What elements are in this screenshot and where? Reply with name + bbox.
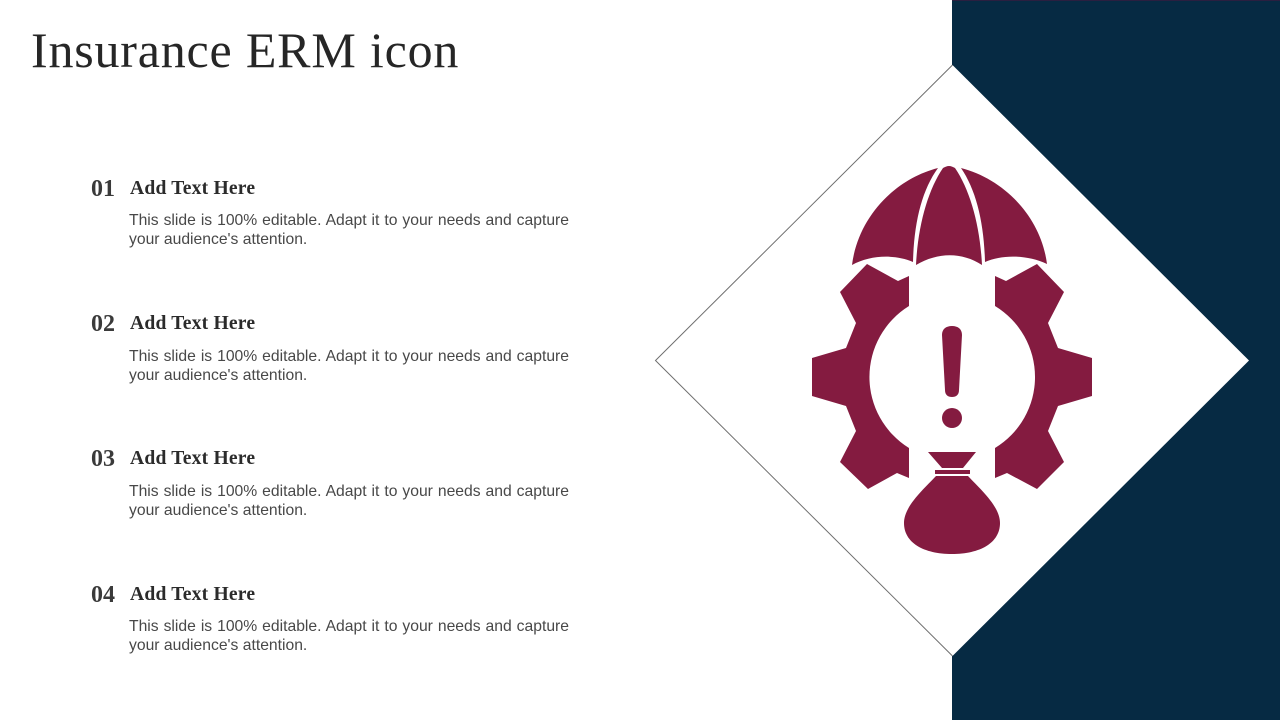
heading 01: Add Text Here [130,178,255,199]
number 02: 02 [91,311,115,337]
icon: insurance risk [812,166,1092,554]
list item 04 [91,582,569,654]
list item 03 [91,446,569,519]
icon: money bag [904,452,1000,554]
icon: exclamation mark [942,326,962,428]
body text 04: your audience's attention. [129,637,307,654]
body text 01: your audience's attention. [129,231,307,248]
icon: gear with exclamation cut-out [812,264,1092,489]
body text 02 [129,348,569,384]
body text 01: This slide is 100% editable. Adapt it to your needs and capture [129,212,569,229]
number 04: 04 [91,582,115,608]
list item 02 [91,311,569,384]
number 03: 03 [91,446,115,472]
heading 04: Add Text Here [130,584,255,605]
navy side panel [952,0,1280,720]
body text 03: This slide is 100% editable. Adapt it to your needs and capture [129,483,569,500]
number 01: 01 [91,176,115,202]
body text 04 [129,618,569,654]
body text 04: This slide is 100% editable. Adapt it to your needs and capture [129,618,569,635]
icon: umbrella [852,166,1047,265]
body text 02: your audience's attention. [129,367,307,384]
body text 03: your audience's attention. [129,502,307,519]
heading 02: Add Text Here [130,313,255,334]
body text 01 [129,212,569,248]
list item 01 [91,176,569,248]
heading 03: Add Text Here [130,448,255,469]
body text 02: This slide is 100% editable. Adapt it to your needs and capture [129,348,569,365]
title: Insurance ERM icon [31,22,459,78]
body text 03 [129,483,569,519]
white diamond [656,65,1249,656]
